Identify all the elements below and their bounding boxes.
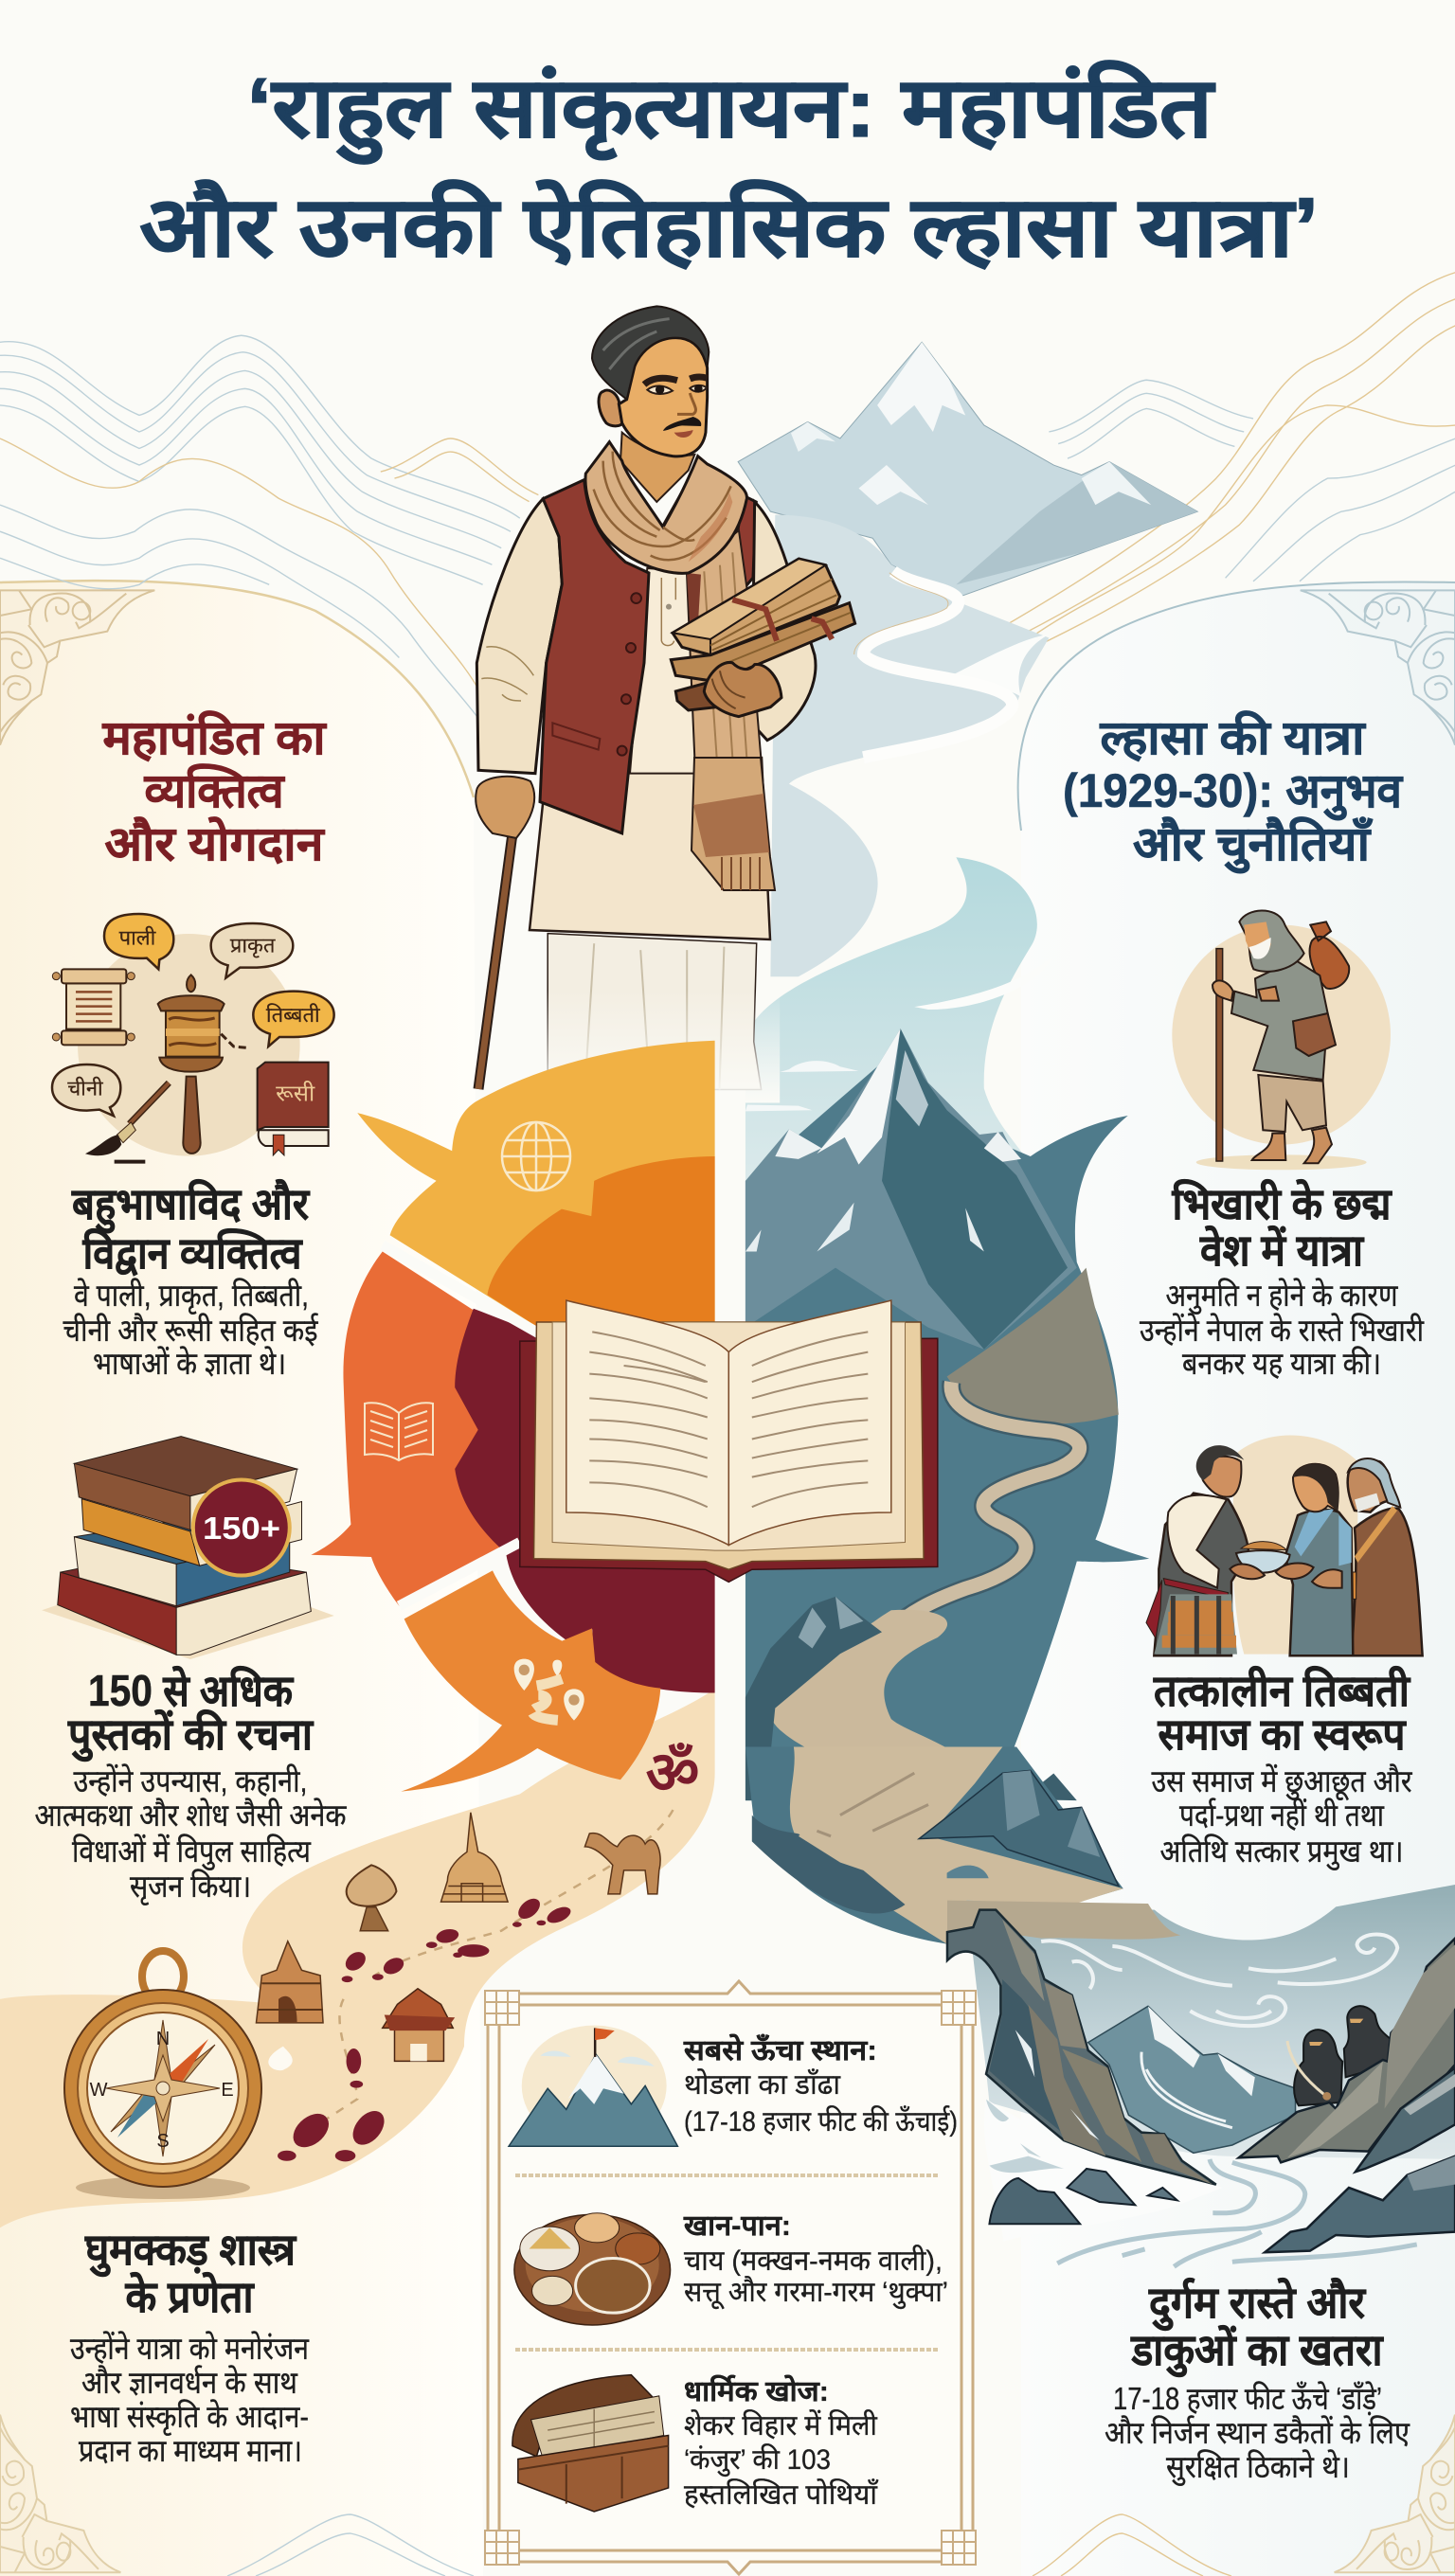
face (619, 338, 708, 456)
bundle (1310, 921, 1349, 989)
panel: left personality background (0, 581, 483, 2576)
mist sky (967, 1885, 1455, 2159)
info box: frame (485, 1981, 976, 2574)
box text: religious discovery: हस्तलिखित पोथियाँ (684, 2478, 879, 2511)
footprints (278, 1897, 576, 2161)
elder (1352, 1509, 1423, 1655)
radial panel: left semi circle segments (311, 1041, 715, 1693)
icon: map route pins (514, 1659, 584, 1721)
ornament: panel corner top right (1301, 590, 1455, 745)
right sleeve (750, 502, 816, 741)
hands (1212, 980, 1233, 1001)
speech bubble: tibetan: तिब्बती (266, 1003, 320, 1027)
pagoda (383, 1989, 453, 2028)
heading: Lhasa journey (1063, 710, 1404, 874)
woman (1285, 1510, 1353, 1655)
text block: dangerous routes and bandits: और निर्जन स्थान डकैतों के लिए (1105, 2415, 1410, 2450)
om tree (347, 1865, 396, 1906)
box text: religious discovery: ‘कंजुर’ की 103 (684, 2443, 831, 2478)
trail landmarks (256, 1813, 660, 2161)
speech bubble: prakrit (211, 923, 293, 978)
heading: Lhasa journey: और चुनौतियाँ (1133, 816, 1374, 874)
icon: scroll (52, 969, 135, 1045)
neck (620, 433, 694, 502)
kurta lower (530, 739, 770, 939)
box text: highest point: थोडला का डाँढा (684, 2068, 841, 2101)
right rocks (1239, 1939, 1455, 2162)
bowl with food (1241, 1542, 1286, 1550)
icon: compass: W (90, 2080, 108, 2101)
brown slope (947, 1268, 1119, 1424)
text block: beggar disguise (1140, 1179, 1425, 1381)
text block: beggar disguise: वेश में यात्रा (1199, 1225, 1365, 1275)
trail: tan travel path (0, 1689, 715, 2227)
text block: dangerous routes and bandits (1105, 2278, 1410, 2486)
box text: highest point (683, 2033, 958, 2138)
text block: Tibetan society: समाज का स्वरूप (1158, 1709, 1407, 1759)
teal river swirl (745, 857, 1053, 1273)
heading: Lhasa journey: ल्हासा की यात्रा (1099, 710, 1367, 764)
ornament: panel corner top left (0, 590, 154, 745)
journey lower road (745, 1746, 1123, 1944)
box text: religious discovery (684, 2374, 879, 2511)
feet (1252, 1128, 1332, 1163)
icon: stack of books with badge (42, 1437, 334, 1659)
eyes and brows (644, 377, 708, 385)
badge (193, 1480, 290, 1576)
title: और उनकी ऐतिहासिक ल्हासा यात्रा’ (140, 179, 1319, 274)
segment: map orange (401, 1570, 660, 1792)
text block: polyglot scholar (63, 1179, 318, 1381)
text block: polyglot scholar: विद्वान व्यक्तित्व (82, 1228, 303, 1278)
walking stick (478, 805, 516, 1089)
text block: Tibetan society: तत्कालीन तिब्बती (1153, 1666, 1411, 1715)
inner orange (487, 1156, 715, 1331)
background contour mountains right (984, 273, 1455, 657)
text block: polyglot scholar: वे पाली, प्राकृत, तिब्बती, (74, 1278, 309, 1315)
text block: 150 books (34, 1666, 347, 1905)
staff (1216, 949, 1223, 1161)
panel: right journey background (1018, 581, 1455, 2576)
shirt placket (630, 568, 698, 774)
dhoti (530, 934, 780, 1102)
vest (540, 480, 649, 833)
icon: om symbol: ॐ (646, 1741, 699, 1806)
text block: dangerous routes and bandits: दुर्गम रास्ते और (1148, 2278, 1367, 2331)
text block: travel science: के प्रणेता (125, 2272, 255, 2321)
box text: highest point: सबसे ऊँचा स्थान: (683, 2033, 877, 2066)
speech bubble: prakrit: प्राकृत (230, 934, 276, 958)
text block: dangerous routes and bandits: डाकुओं का खतरा (1130, 2325, 1384, 2378)
text block: travel science (70, 2225, 310, 2468)
ear (599, 390, 622, 426)
journey mountain teardrop (745, 1029, 1149, 1800)
text block: travel science: उन्होंने यात्रा को मनोरंजन (70, 2331, 310, 2366)
right vest edge (737, 495, 756, 587)
distant peak (1088, 2006, 1296, 2153)
icon: globe (502, 1122, 570, 1190)
text block: Tibetan society: पर्दा-प्रथा नहीं थी तथा (1179, 1798, 1385, 1833)
heading: personality and contribution: और योगदान (104, 816, 326, 870)
heading: Lhasa journey: (1929-30): अनुभव (1063, 764, 1404, 821)
right hand (704, 662, 781, 717)
text block: travel science: प्रदान का माध्यम माना। (79, 2433, 302, 2468)
white dividers (383, 1245, 543, 1606)
ornament: bottom contour peaks (227, 2514, 1231, 2576)
collar (622, 467, 689, 530)
scarf strip top (687, 530, 761, 758)
icon: paint brush (85, 1082, 169, 1162)
text block: beggar disguise: बनकर यह यात्रा की। (1182, 1346, 1381, 1381)
icon: food platter (514, 2213, 671, 2325)
icon: disguised traveller (1172, 910, 1391, 1170)
text block: 150 books: 150 से अधिक (88, 1666, 294, 1715)
speech bubble: pali: पाली (119, 925, 156, 949)
box text: food: खान-पान: (683, 2210, 791, 2242)
speech bubble: tibetan (253, 992, 334, 1046)
text block: Tibetan society (1152, 1666, 1412, 1870)
text block: polyglot scholar: बहुभाषाविद और (71, 1179, 311, 1234)
icon: compass: N (156, 2029, 170, 2049)
text block: 150 books: आत्मकथा और शोध जैसी अनेक (34, 1798, 347, 1833)
lower rocks (1265, 2156, 1455, 2252)
hair (592, 306, 709, 400)
speech bubble: pali (104, 914, 173, 969)
hands (1230, 1565, 1265, 1579)
icon: compass (64, 1951, 261, 2199)
heading: personality and contribution: व्यक्तित्व (144, 763, 286, 817)
ornament: bottom right corner (1335, 2415, 1455, 2572)
palm leaf manuscripts (675, 682, 717, 710)
text block: Tibetan society: उस समाज में छुआछूत और (1152, 1763, 1412, 1801)
face (1244, 921, 1271, 957)
icon: russian book (258, 1063, 329, 1155)
icon: prayer wheel (158, 975, 249, 1154)
text block: polyglot scholar: भाषाओं के ज्ञाता थे। (93, 1346, 286, 1381)
icon: russian book: रूसी (276, 1081, 315, 1107)
icon: compass: S (156, 2131, 170, 2152)
title: ‘राहुल सांकृत्यायन: महापंडित (246, 60, 1215, 165)
main peak (745, 1029, 1077, 1350)
badge label: 150+ (203, 1511, 280, 1546)
heading: personality and contribution: महापंडित का (101, 710, 328, 764)
camel (584, 1834, 660, 1894)
background contour mountains left (0, 335, 538, 724)
trousers (1258, 1075, 1326, 1132)
box text: highest point: (17-18 हजार फीट की ऊँचाई) (684, 2105, 958, 2138)
upper body traced at 3x (476, 306, 855, 833)
text block: 150 books: विधाओं में विपुल साहित्य (72, 1834, 312, 1870)
stupa (441, 1813, 508, 1902)
box text: religious discovery: शेकर विहार में मिली (684, 2409, 878, 2442)
text block: travel science: और ज्ञानवर्धन के साथ (81, 2365, 298, 2400)
icon: open book (365, 1403, 433, 1460)
portrait: Rahul Sankrityayan standing figure (476, 306, 855, 1102)
icon: summit with flag (509, 2026, 677, 2146)
text block: dangerous routes and bandits: सुरक्षित ठिकाने थे। (1166, 2449, 1350, 2486)
man (1154, 1494, 1248, 1655)
shoulder bag (1293, 1013, 1336, 1056)
left cliff (947, 1910, 1216, 2185)
water streaks (984, 2100, 1223, 2242)
tunic (1231, 959, 1328, 1080)
winding road (891, 1382, 1080, 1629)
box text: food (683, 2210, 948, 2310)
icon: treasure chest of manuscripts (512, 2375, 669, 2512)
icon: three Tibetans sharing food (1146, 1436, 1423, 1655)
segment: globe yellow (357, 1041, 715, 1328)
text block: 150 books: उन्होंने उपन्यास, कहानी, (74, 1763, 307, 1798)
inner maroon (455, 1309, 715, 1693)
hood (1239, 910, 1304, 972)
distant snow mountains and river (738, 342, 1197, 976)
text block: polyglot scholar: चीनी और रूसी सहित कई (63, 1313, 318, 1348)
title (140, 60, 1319, 274)
storm valley scene with bandits (947, 1885, 1455, 2266)
temple (256, 1941, 323, 2023)
wind swirls (1041, 1934, 1397, 2026)
box text: food: सत्तू और गरमा-गरम ‘थुक्पा’ (684, 2276, 948, 2310)
text block: 150 books: सृजन किया। (130, 1869, 251, 1905)
central open book (520, 1300, 938, 1582)
speech bubble: chinese: चीनी (67, 1077, 103, 1100)
icon cluster: languages (52, 914, 334, 1162)
text block: beggar disguise: अनुमति न होने के कारण (1165, 1278, 1398, 1315)
text block: 150 books: पुस्तकों की रचना (67, 1709, 314, 1762)
speech bubble: chinese (52, 1064, 120, 1116)
bandits (1287, 2006, 1391, 2105)
text block: beggar disguise: भिखारी के छद्म (1172, 1179, 1393, 1228)
segment: book orange red (311, 1251, 520, 1606)
heading: personality and contribution (101, 710, 328, 870)
text block: dangerous routes and bandits: 17-18 हजार फीट ऊँचे ‘डाँड़े’ (1113, 2381, 1382, 2416)
text block: Tibetan society: अतिथि सत्कार प्रमुख था। (1159, 1834, 1404, 1870)
box text: food: चाय (मक्खन-नमक वाली), (684, 2245, 943, 2277)
text block: travel science: भाषा संस्कृति के आदान- (70, 2399, 309, 2436)
scarf hanging end (692, 758, 775, 890)
scarf wrap (585, 442, 746, 573)
icon: compass: E (221, 2080, 234, 2101)
left hand on stick (476, 777, 534, 838)
left sleeve (476, 499, 562, 774)
moustache (663, 417, 701, 431)
ornament: bottom left corner (0, 2415, 120, 2572)
box text: religious discovery: धार्मिक खोज: (684, 2374, 829, 2407)
text block: travel science: घुमक्कड़ शास्त्र (84, 2225, 296, 2278)
